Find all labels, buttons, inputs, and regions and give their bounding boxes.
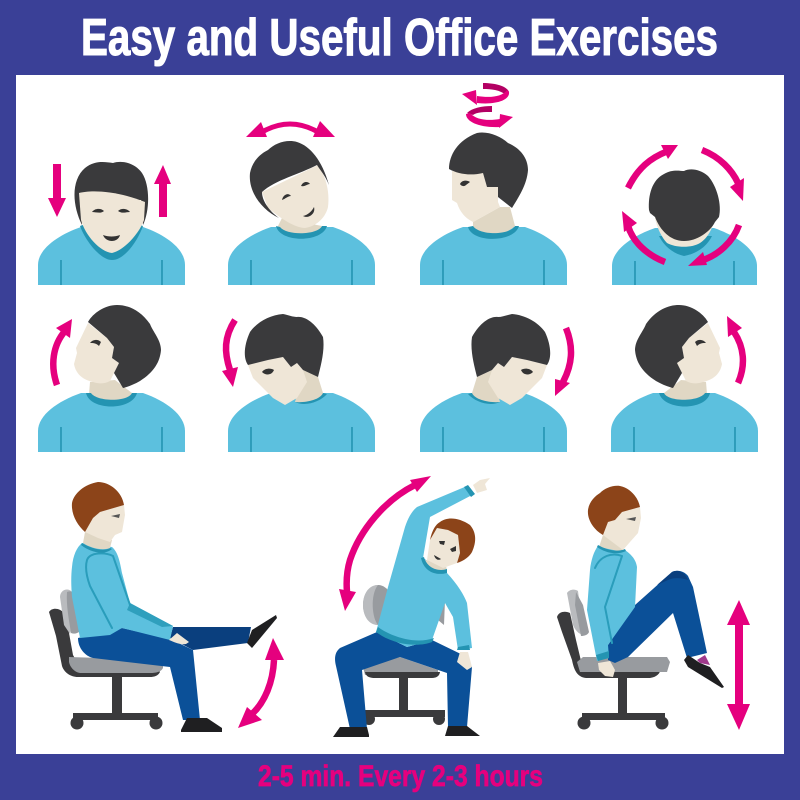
collar [295, 393, 327, 404]
features [434, 541, 456, 560]
exercise: look down right [420, 314, 571, 452]
eye [460, 181, 470, 186]
arrow: up [154, 165, 171, 217]
shirt [376, 486, 474, 650]
sleeve seams [86, 553, 130, 628]
exercise: nod front view [38, 162, 185, 285]
eye [262, 369, 274, 374]
exercise: head turn [420, 83, 567, 285]
arrow: twist bottom [466, 106, 513, 128]
features [282, 182, 314, 217]
hand [598, 661, 615, 677]
neck [599, 535, 623, 552]
torso [612, 228, 757, 285]
arrow: up [53, 319, 72, 385]
neck [83, 532, 112, 549]
torso [420, 227, 567, 285]
chair [363, 585, 445, 725]
features [92, 209, 130, 241]
face [74, 323, 119, 383]
collar [81, 543, 112, 553]
neck [277, 218, 322, 237]
hands [457, 478, 490, 670]
seated exercise: knee raise [557, 486, 750, 730]
mirrored figure [420, 314, 567, 452]
collar [80, 224, 143, 260]
arrow: down [48, 164, 66, 217]
eye [521, 369, 533, 374]
exercise: neck circle [612, 145, 757, 285]
arrow: leg movement [238, 638, 284, 728]
hand [169, 633, 189, 644]
torso [38, 227, 185, 285]
face [85, 505, 125, 542]
mirrored figure [611, 305, 758, 452]
exercise: look down left [222, 314, 375, 452]
eye [695, 340, 706, 346]
arrow: down [222, 320, 238, 387]
hair [74, 162, 148, 225]
arrow: up [727, 316, 743, 383]
hair [449, 133, 528, 208]
shoe: raised [247, 615, 277, 648]
eye [111, 514, 120, 518]
collar [659, 236, 712, 256]
torso [228, 227, 375, 285]
legs [335, 632, 472, 729]
cuff [596, 651, 609, 661]
face [677, 323, 722, 383]
hair [649, 169, 720, 241]
shirt [587, 546, 637, 661]
hair [245, 314, 324, 377]
arrow: top-left arc [628, 145, 678, 188]
sleeve seam [595, 554, 622, 643]
exercise: look up right [611, 305, 758, 452]
torso [228, 393, 375, 452]
collar [421, 557, 447, 574]
legs [608, 571, 707, 663]
collar [468, 393, 500, 404]
face [452, 171, 500, 222]
exercise: side tilt [228, 121, 375, 285]
hair [635, 305, 708, 388]
arrow: up-down [727, 600, 750, 730]
neck [664, 380, 707, 403]
arrow: twist top [462, 83, 509, 105]
torso [38, 393, 185, 452]
sock [697, 655, 710, 665]
eye [626, 517, 636, 521]
chair [557, 590, 670, 730]
shoe [684, 655, 724, 688]
collar [659, 393, 710, 406]
footer note: 2-5 min. Every 2-3 hours [258, 760, 543, 793]
face [655, 218, 715, 247]
collar [468, 226, 519, 239]
hair [72, 482, 124, 532]
seated exercise: side stretch [333, 476, 490, 737]
hair [471, 314, 550, 377]
hair [588, 486, 640, 535]
neck [89, 380, 132, 403]
neck [473, 207, 515, 235]
knee shade [657, 571, 688, 585]
arrow: bottom-left arc [622, 211, 665, 262]
face [248, 357, 307, 405]
chair [49, 590, 163, 730]
face [427, 528, 460, 568]
eye [90, 340, 101, 346]
face [79, 191, 145, 253]
collar [597, 545, 626, 553]
neck [424, 560, 447, 572]
torso [611, 393, 758, 452]
face [603, 507, 641, 550]
shoes [333, 726, 480, 737]
arrow: bottom-right arc [688, 225, 739, 266]
shoe: floor [181, 718, 222, 732]
face [262, 165, 328, 228]
face [488, 357, 547, 405]
torso [420, 393, 567, 452]
shirt hem [376, 627, 434, 645]
neck [295, 370, 323, 402]
hair [88, 305, 161, 388]
far leg [170, 627, 251, 650]
hair [430, 519, 475, 563]
shirt [71, 543, 173, 640]
arrow: down [555, 328, 571, 396]
seated exercise: leg raise [49, 482, 284, 732]
exercise: look up left [38, 305, 185, 452]
near leg [78, 628, 200, 720]
collar [86, 393, 137, 406]
arrow: side stretch [339, 476, 431, 611]
collar [276, 226, 327, 239]
neck [472, 370, 500, 402]
arrow: left-right arc [246, 121, 335, 137]
far arm [127, 603, 173, 627]
hair [250, 141, 329, 218]
arrow: top-right arc [702, 150, 744, 201]
cuffs [457, 485, 475, 650]
